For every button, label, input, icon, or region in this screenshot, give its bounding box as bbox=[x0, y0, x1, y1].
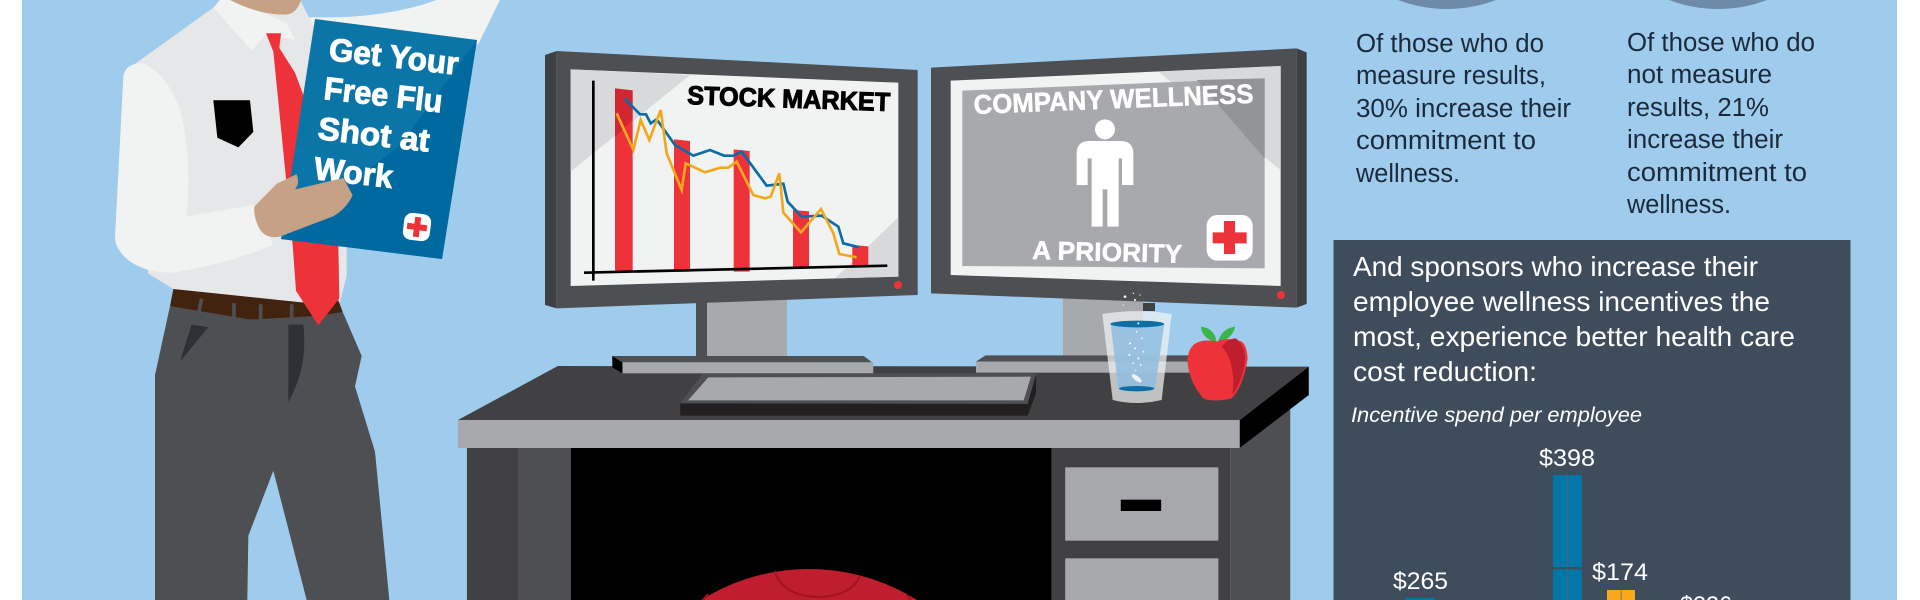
bar chart bbox=[1393, 445, 1732, 600]
text: those who do not measure: wellness. bbox=[1626, 191, 1731, 219]
apple leaves bbox=[1201, 327, 1235, 343]
flyer red cross icon bbox=[402, 212, 432, 242]
text: those who do not measure bbox=[1626, 29, 1815, 219]
panel heading text: employee wellness incentives the bbox=[1353, 286, 1770, 317]
chart bars bbox=[615, 88, 868, 272]
water bottom bbox=[1119, 386, 1154, 391]
icon: red cross bbox=[1207, 215, 1253, 261]
man: shirt pocket bbox=[213, 100, 253, 147]
monitor frame and screen bbox=[931, 48, 1307, 308]
desk top and keyboard bbox=[458, 355, 1309, 448]
man: hand holding flyer bbox=[254, 174, 353, 237]
text: those who measure bbox=[1355, 30, 1572, 188]
monitor stand bbox=[1063, 295, 1155, 357]
text: those who do not measure: commitment to bbox=[1627, 159, 1807, 187]
desk side edge bbox=[1240, 367, 1309, 448]
text: those who measure: wellness. bbox=[1355, 160, 1460, 188]
text: those who do not measure: increase their bbox=[1627, 126, 1784, 154]
text: those who do not measure: Of those who do bbox=[1627, 29, 1815, 57]
panel: incentive spend bbox=[1334, 240, 1850, 600]
desk: left leg bbox=[467, 448, 571, 600]
stock market heading: STOCK MARKET bbox=[687, 80, 891, 117]
bar values bbox=[1393, 445, 1732, 600]
bar: $265 bbox=[1405, 598, 1435, 600]
water surface bbox=[1110, 321, 1164, 327]
left monitor base bbox=[612, 356, 873, 373]
keyboard bbox=[680, 373, 1036, 416]
measure results circles bbox=[1398, 0, 1767, 9]
man: belt bbox=[170, 289, 343, 321]
desk front edge bbox=[458, 420, 1240, 448]
text: those who measure: commitment to bbox=[1356, 127, 1536, 155]
bar: $174 bbox=[1607, 590, 1635, 600]
text: those who do not measure: results, 21% bbox=[1627, 94, 1769, 122]
glass of water with tablet bbox=[1102, 293, 1172, 403]
bar values: $398 bbox=[1539, 445, 1595, 472]
chart subtitle: Incentive spend per employee bbox=[1351, 403, 1642, 427]
blue trend line bbox=[624, 98, 859, 247]
bubbles bbox=[1123, 293, 1144, 371]
right monitor: company wellness bbox=[931, 48, 1307, 357]
text: those who do not measure: not measure bbox=[1627, 61, 1772, 89]
text: those who measure: Of those who do bbox=[1356, 30, 1544, 58]
man holding flu shot flyer bbox=[115, 0, 500, 600]
flyer: Get Your Free Flu Shot at Work bbox=[281, 19, 477, 259]
flyer text: Free Flu bbox=[322, 70, 445, 119]
water bbox=[1111, 324, 1164, 389]
a priority text: A PRIORITY bbox=[1032, 235, 1183, 269]
flyer text bbox=[312, 31, 460, 195]
bar values: $265 bbox=[1393, 568, 1448, 595]
desk bbox=[467, 408, 1290, 600]
text: those who measure: 30% increase their bbox=[1356, 95, 1572, 123]
flyer text: Shot at bbox=[316, 110, 432, 159]
flyer text: Get Your bbox=[327, 31, 460, 82]
man: trousers bbox=[155, 306, 389, 600]
text: those who measure: measure results, bbox=[1356, 62, 1546, 90]
panel heading text: And sponsors who increase their bbox=[1353, 251, 1758, 282]
panel heading text bbox=[1353, 251, 1795, 387]
monitor frame and screen bbox=[545, 51, 918, 308]
red exercise ball bbox=[701, 569, 917, 600]
chart axes bbox=[584, 81, 887, 281]
apple body bbox=[1188, 339, 1248, 400]
bar values: $174 bbox=[1592, 559, 1648, 586]
chart highlight overlay bbox=[615, 88, 633, 137]
man: shirt torso bbox=[127, 0, 347, 302]
desk: knee space bbox=[571, 448, 1052, 600]
flyer text: Work bbox=[312, 150, 395, 195]
bar: $398 bbox=[1553, 475, 1582, 600]
orange trend line bbox=[617, 110, 857, 257]
monitor stand bbox=[696, 295, 787, 357]
stock chart bbox=[584, 81, 887, 281]
man: necktie bbox=[266, 33, 339, 325]
left monitor: stock market bbox=[545, 51, 918, 357]
apple shaded side bbox=[1222, 338, 1245, 395]
desk: drawer unit bbox=[1052, 408, 1290, 600]
desk surface bbox=[458, 366, 1309, 420]
glass body bbox=[1102, 311, 1172, 403]
man: bent sleeve bbox=[115, 63, 273, 273]
company wellness heading: COMPANY WELLNESS bbox=[973, 79, 1254, 120]
right monitor base bbox=[976, 355, 1192, 373]
apple bbox=[1188, 327, 1248, 400]
icon: person bbox=[1077, 119, 1133, 227]
man: raised sleeve bbox=[293, 0, 500, 77]
fizzing tablet bbox=[1130, 373, 1143, 384]
panel heading text: most, experience better health care bbox=[1353, 321, 1795, 352]
panel heading text: cost reduction: bbox=[1353, 356, 1537, 387]
